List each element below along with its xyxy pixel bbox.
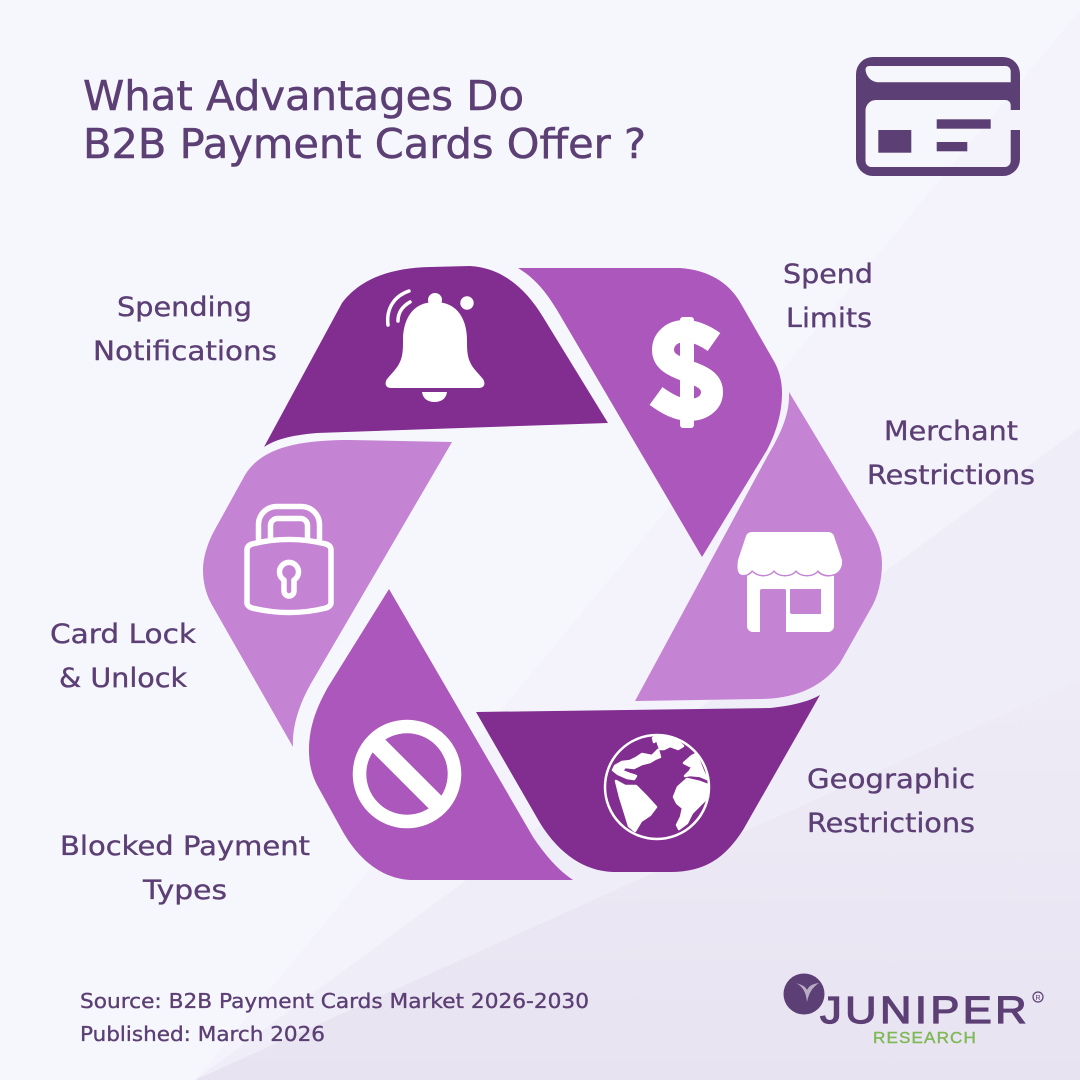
logo: Juniper Research: RESEARCH [873, 1030, 977, 1047]
panel: spend limits segment [518, 268, 782, 557]
panel: geographic restrictions segment [476, 695, 820, 872]
label: blocked payment types: Types [142, 875, 227, 906]
panel: merchant restrictions segment [635, 392, 882, 701]
label: spending notifications: Notifications [93, 336, 277, 367]
title: What Advantages Do [83, 72, 524, 120]
label: merchant restrictions [867, 416, 1035, 491]
icon: bell [386, 291, 484, 402]
label: spend limits: Spend [783, 259, 873, 290]
label: card lock and unlock: Card Lock [50, 619, 196, 650]
label: card lock and unlock: & Unlock [59, 663, 187, 694]
icon: dollar sign [656, 317, 714, 428]
label: merchant restrictions: Restrictions [867, 460, 1035, 491]
icon: payment card [856, 57, 1020, 176]
icon: padlock [247, 506, 331, 612]
source note: Source: B2B Payment Cards Market 2026-2030 [80, 989, 589, 1013]
logo: Juniper Research [784, 974, 1043, 1047]
source note [80, 989, 589, 1046]
label: blocked payment types [60, 831, 310, 906]
label: card lock and unlock [50, 619, 196, 694]
label: spend limits: Limits [786, 303, 872, 334]
icon: prohibited sign [360, 726, 454, 822]
label: spending notifications: Spending [117, 292, 252, 323]
logo: Juniper Research: R [1035, 995, 1041, 1002]
logo: Juniper Research: JUNIPER [820, 990, 1030, 1032]
icon: storefront [738, 532, 842, 632]
panel: spending notifications segment [264, 266, 608, 447]
label: spend limits [783, 259, 873, 334]
icon: globe [605, 735, 709, 839]
panel: card lock and unlock segment [203, 440, 452, 747]
label: geographic restrictions: Restrictions [807, 808, 975, 839]
title: B2B Payment Cards Offer ? [83, 120, 646, 168]
panel: blocked payment types segment [309, 589, 573, 880]
label: blocked payment types: Blocked Payment [60, 831, 310, 862]
title [83, 72, 646, 168]
label: geographic restrictions [807, 764, 975, 839]
label: merchant restrictions: Merchant [884, 416, 1018, 447]
source note: Published: March 2026 [80, 1022, 325, 1046]
label: geographic restrictions: Geographic [807, 764, 975, 795]
label: spending notifications [93, 292, 277, 367]
